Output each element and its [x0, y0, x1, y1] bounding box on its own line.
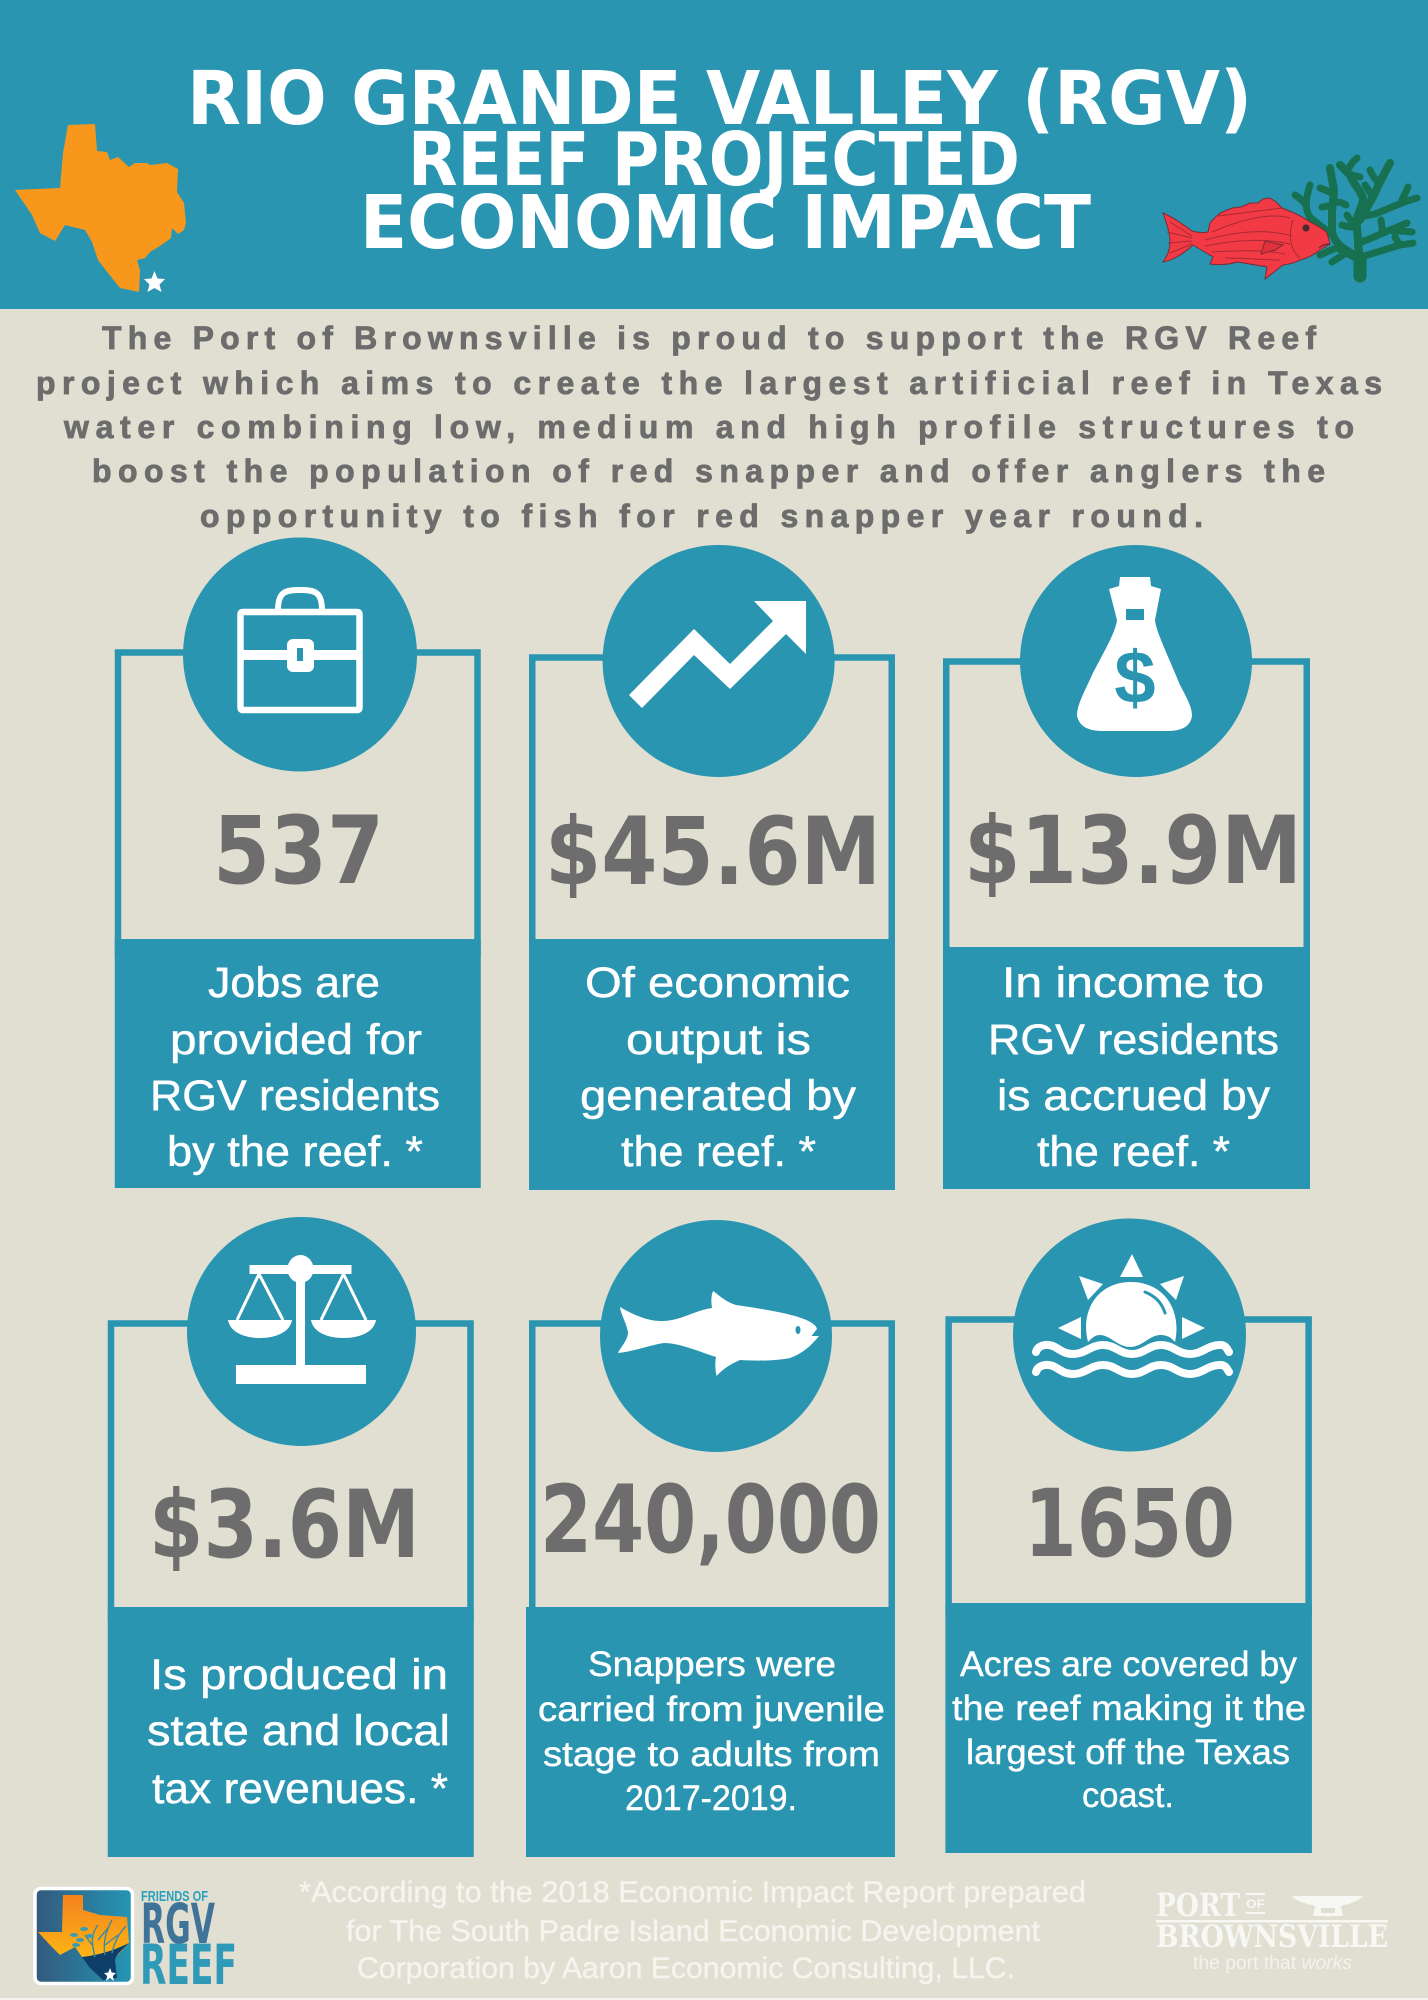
caption: snappers: 2017-2019. — [625, 1779, 797, 1818]
caption: economic output — [580, 959, 857, 1176]
caption: income: the reef. * — [1037, 1128, 1230, 1176]
footnote: *According to the 2018 Economic Impact Report prepared — [299, 1876, 1086, 1909]
logo: Friends of RGV Reef: REEF — [140, 1933, 237, 1997]
card: jobs — [115, 538, 481, 1188]
icon: money bag: $ — [1114, 636, 1156, 719]
caption: tax revenues — [147, 1651, 450, 1813]
caption: economic output: generated by — [580, 1072, 857, 1120]
logo: Port of Brownsville — [1156, 1886, 1388, 1974]
caption: snappers — [538, 1645, 885, 1818]
caption: acres: Acres are covered by — [960, 1645, 1297, 1684]
footnote: for The South Padre Island Economic Development — [346, 1915, 1041, 1948]
header banner — [0, 0, 1428, 309]
title: RIO GRANDE VALLEY (RGV) — [187, 56, 1252, 142]
title: ECONOMIC IMPACT — [360, 180, 1091, 266]
number: 240,000: 240,000 — [540, 1466, 881, 1575]
caption: tax revenues: Is produced in — [150, 1651, 448, 1699]
caption: jobs: Jobs are — [208, 959, 380, 1007]
card: acres — [945, 1218, 1312, 1853]
footnote: Corporation by Aaron Economic Consulting, LLC. — [357, 1952, 1015, 1985]
icon: fish — [600, 1220, 832, 1452]
title: REEF PROJECTED — [408, 117, 1020, 203]
logo: Port of Brownsville: PORT — [1156, 1886, 1240, 1924]
card: tax revenues — [108, 1217, 474, 1857]
logo: Port of Brownsville: OF — [1246, 1897, 1265, 1911]
caption: acres: the reef making it the — [952, 1689, 1306, 1728]
caption: jobs — [150, 959, 440, 1176]
icon: rising arrow — [603, 545, 835, 777]
card: income — [943, 545, 1310, 1189]
icon: coral — [1295, 158, 1417, 276]
caption: tax revenues: state and local — [147, 1707, 450, 1755]
caption: income: In income to — [1002, 959, 1264, 1007]
caption: acres: largest off the Texas — [966, 1733, 1290, 1772]
caption: jobs: by the reef. * — [167, 1128, 423, 1176]
intro paragraph: water combining low, medium and high profile structures to — [63, 409, 1354, 445]
caption: jobs: RGV residents — [150, 1072, 440, 1120]
caption: income — [988, 959, 1279, 1176]
caption: economic output: the reef. * — [621, 1128, 816, 1176]
logo: Friends of RGV Reef: RGV — [141, 1892, 215, 1956]
number: $45.6M: $45.6M — [545, 798, 881, 907]
number: 537: 537 — [213, 797, 384, 906]
intro paragraph: project which aims to create the largest artificial reef in Texas — [36, 365, 1382, 401]
caption: income: RGV residents — [988, 1016, 1279, 1064]
card: snappers — [526, 1220, 895, 1857]
intro paragraph — [36, 320, 1382, 534]
intro paragraph: boost the population of red snapper and offer anglers the — [92, 453, 1325, 489]
icon: scales — [187, 1217, 416, 1446]
number: $3.6M: $3.6M — [149, 1471, 420, 1580]
logo: Port of Brownsville: BROWNSVILLE — [1156, 1919, 1388, 1955]
caption: snappers: stage to adults from — [543, 1735, 880, 1774]
caption: economic output: output is — [626, 1016, 811, 1064]
icon: money bag — [1020, 545, 1252, 777]
icon: briefcase — [183, 538, 417, 772]
number: 1650: 1650 — [1024, 1470, 1235, 1579]
caption: tax revenues: tax revenues. * — [152, 1765, 448, 1813]
logo: Friends of RGV Reef — [35, 1888, 237, 1997]
intro paragraph: The Port of Brownsville is proud to support the RGV Reef — [102, 320, 1316, 356]
caption: snappers: carried from juvenile — [538, 1690, 885, 1729]
icon: sun over waves — [1013, 1218, 1246, 1452]
caption: acres — [952, 1645, 1306, 1815]
caption: jobs: provided for — [170, 1016, 422, 1064]
caption: income: is accrued by — [997, 1072, 1271, 1120]
title — [187, 56, 1252, 266]
logo: Friends of RGV Reef: FRIENDS OF — [141, 1889, 208, 1905]
card: economic output — [529, 545, 895, 1190]
icon: Texas map — [15, 124, 186, 292]
icon: red snapper fish — [1163, 198, 1330, 279]
caption: economic output: Of economic — [585, 959, 850, 1007]
caption: acres: coast. — [1082, 1776, 1174, 1815]
number: $13.9M: $13.9M — [964, 797, 1302, 906]
footnote — [299, 1876, 1086, 1985]
caption: snappers: Snappers were — [588, 1645, 836, 1684]
intro paragraph: opportunity to fish for red snapper year round. — [200, 498, 1203, 534]
logo: Port of Brownsville: the port that works — [1193, 1953, 1352, 1974]
